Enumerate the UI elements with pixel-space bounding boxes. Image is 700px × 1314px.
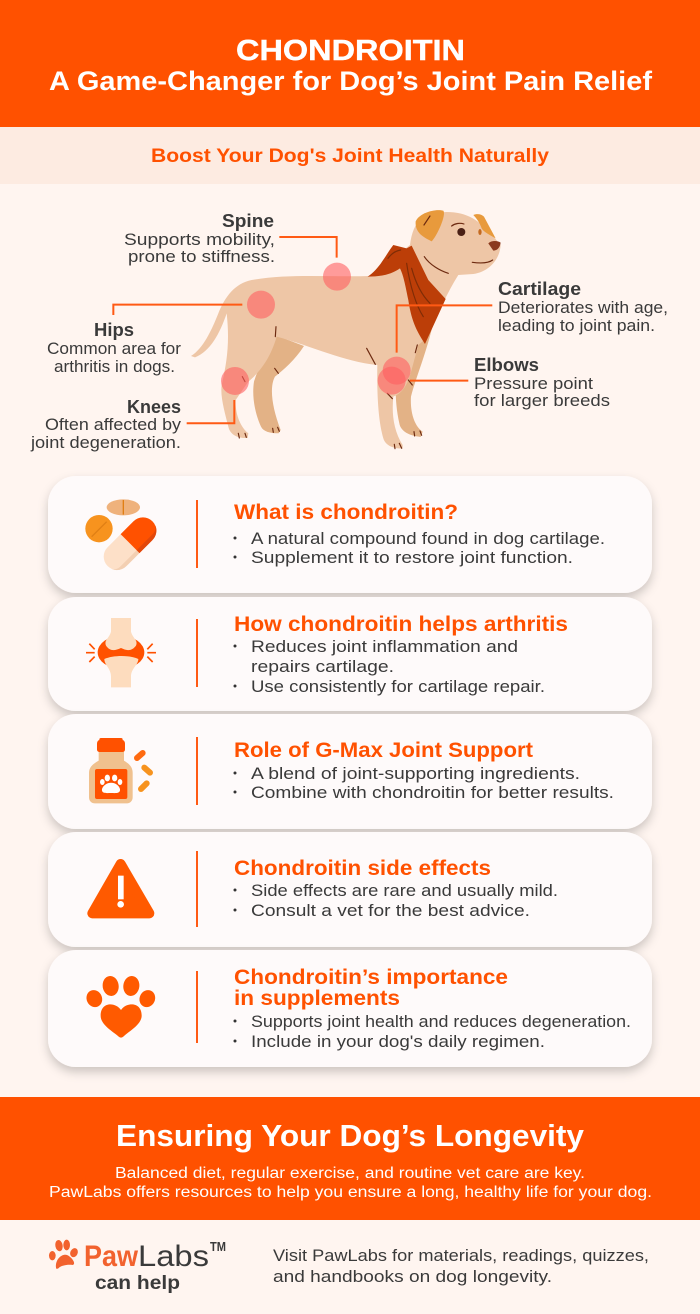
- panel: importance in supplements: Chondroitin’s importance: [234, 966, 508, 989]
- logo: PawLabs: TM: [210, 1239, 226, 1254]
- panel: how chondroitin helps arthritis: How chondroitin helps arthritis: [234, 613, 568, 636]
- panel: side effects: [48, 832, 652, 947]
- dog illustration: [113, 210, 501, 449]
- bandana: [368, 245, 446, 344]
- header banner: [0, 0, 700, 127]
- footer banner: longevity: [0, 1097, 700, 1220]
- bullet list: A blend of joint-supporting ingredients.: [251, 765, 580, 783]
- bullet list: [234, 882, 558, 920]
- footer banner: longevity: Balanced diet, regular exercise, and routine vet care are key.: [115, 1165, 585, 1182]
- bullet list: repairs cartilage.: [251, 658, 394, 676]
- bullet list: [234, 765, 614, 802]
- callout: knees: Often affected by: [45, 416, 182, 434]
- callout: spine: Spine: [222, 211, 274, 231]
- panel: importance in supplements: [48, 950, 652, 1067]
- callout: hips: Hips: [94, 320, 134, 340]
- bullet list: [234, 638, 545, 696]
- face and line details: [238, 216, 493, 449]
- call to action text: and handbooks on dog longevity.: [273, 1268, 552, 1286]
- logo: PawLabs: can help: [95, 1273, 180, 1294]
- ears: [416, 210, 496, 241]
- panel: what is chondroitin: What is chondroitin?: [234, 501, 458, 524]
- panel: side effects: Chondroitin side effects: [234, 857, 491, 880]
- panel: role of G-Max: Role of G-Max Joint Support: [234, 739, 533, 762]
- subtitle band: Boost Your Dog's Joint Health Naturally: [151, 146, 549, 167]
- bullet list: Side effects are rare and usually mild.: [251, 882, 558, 900]
- callout: spine: [124, 211, 275, 266]
- callout: elbows: Pressure point: [474, 375, 593, 393]
- bullet list: Consult a vet for the best advice.: [251, 902, 530, 920]
- leader lines: [113, 237, 492, 423]
- callout: cartilage: leading to joint pain.: [498, 317, 655, 335]
- bullet list: Supplement it to restore joint function.: [251, 549, 573, 567]
- callout: knees: [30, 397, 182, 452]
- callout: knees: joint degeneration.: [30, 434, 181, 452]
- icon: supplement bottle: [89, 738, 150, 803]
- callout: cartilage: [498, 279, 668, 335]
- icon: paw heart: [84, 975, 158, 1038]
- icon: paw: [49, 1239, 79, 1269]
- callout: cartilage: Cartilage: [498, 279, 581, 299]
- callout: hips: [47, 320, 182, 376]
- title: CHONDROITIN: [236, 35, 465, 67]
- callout: cartilage: Deteriorates with age,: [498, 299, 668, 317]
- bullet list: Reduces joint inflammation and: [251, 638, 518, 656]
- logo: PawLabs: Paw: [84, 1240, 139, 1273]
- bullet list: [234, 530, 605, 567]
- title: [49, 35, 653, 96]
- bullet list: Include in your dog's daily regimen.: [251, 1033, 545, 1051]
- panel: role of G-Max: [48, 714, 652, 829]
- bullet list: Use consistently for cartilage repair.: [251, 678, 545, 696]
- subtitle band: [0, 127, 700, 184]
- icon: pills: [85, 499, 162, 575]
- callout: elbows: for larger breeds: [474, 392, 610, 410]
- panel: importance in supplements: in supplements: [234, 987, 400, 1010]
- call to action text: [273, 1247, 649, 1286]
- callout: hips: arthritis in dogs.: [54, 358, 175, 376]
- callout: hips: Common area for: [47, 340, 182, 358]
- bullet list: [234, 1013, 631, 1051]
- icon: joint: [86, 618, 156, 687]
- bullet list: Supports joint health and reduces degeneration.: [251, 1013, 631, 1031]
- callout: spine: Supports mobility,: [124, 231, 275, 249]
- panel: what is chondroitin: [48, 476, 652, 593]
- callout: knees: Knees: [127, 397, 181, 417]
- joint markers: [221, 263, 411, 395]
- bullet list: A natural compound found in dog cartilage.: [251, 530, 605, 548]
- callout: elbows: [474, 355, 610, 410]
- call to action text: Visit PawLabs for materials, readings, quizzes,: [273, 1247, 649, 1265]
- logo: PawLabs: [49, 1239, 226, 1294]
- footer banner: longevity: PawLabs offers resources to help you ensure a long, healthy life for your dog.: [49, 1184, 652, 1201]
- callout: elbows: Elbows: [474, 355, 539, 375]
- bullet list: Combine with chondroitin for better results.: [251, 784, 614, 802]
- icon: warning triangle: [92, 864, 149, 913]
- callout: spine: prone to stiffness.: [128, 248, 275, 266]
- footer banner: longevity: Ensuring Your Dog’s Longevity: [116, 1118, 585, 1153]
- title: A Game-Changer for Dog’s Joint Pain Relief: [49, 66, 653, 96]
- panel: how chondroitin helps arthritis: [48, 597, 652, 711]
- logo: PawLabs: Labs: [138, 1240, 209, 1273]
